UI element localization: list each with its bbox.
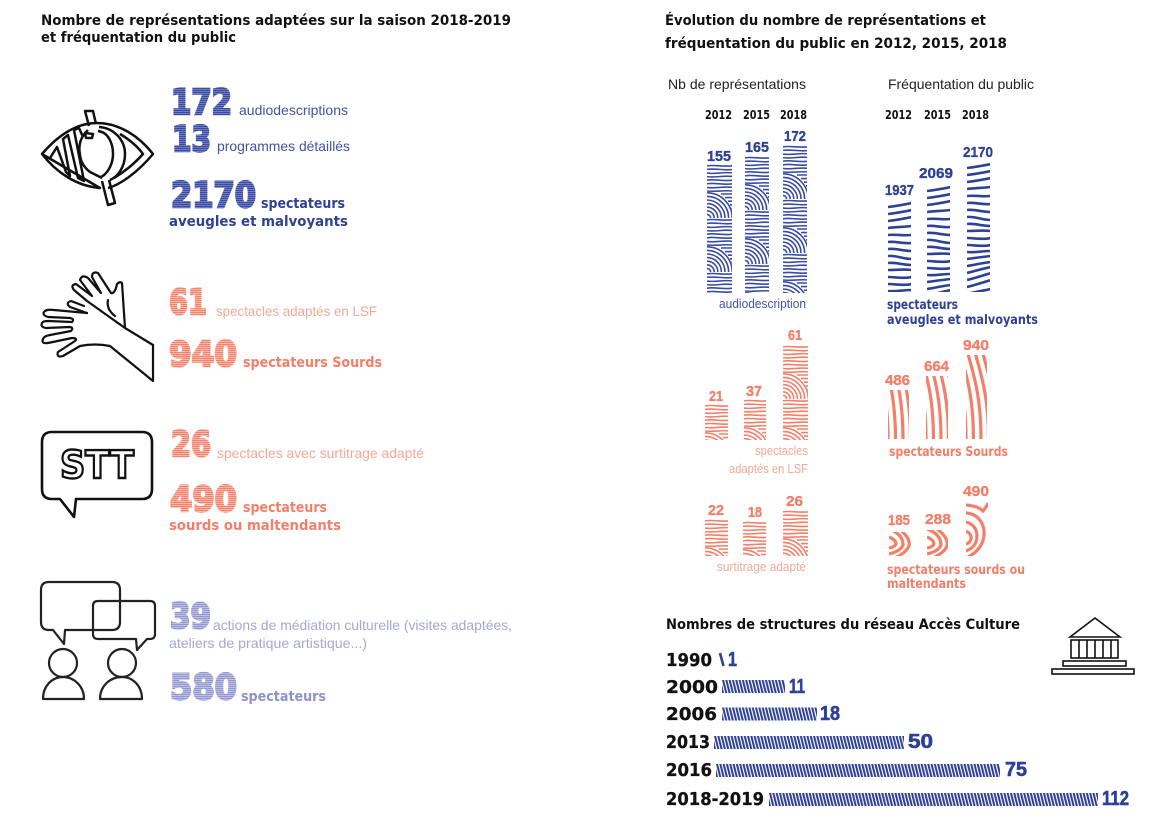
row: 2018-2019: 112 [1102, 788, 1129, 810]
stat: 940 spectateurs Sourds: 940 [169, 335, 237, 375]
chart: audiodescription representations: 165 [745, 139, 769, 156]
stat: 2170 spectateurs: aveugles et malvoyants [169, 214, 348, 230]
chart: blind attendance: 2069 [919, 165, 953, 182]
row: 2016: 75 [1005, 759, 1027, 781]
row: 2000: 11 [789, 676, 805, 698]
stat: 580 spectateurs [170, 668, 326, 708]
chart: audiodescription representations: 172 [784, 128, 806, 145]
row: 2006: 18 [820, 703, 840, 725]
icon: STT speech bubble [42, 432, 152, 517]
row: 1990 [666, 649, 737, 671]
heading: left title: Nombre de représentations adaptées sur la saison 2018-2019 [41, 13, 511, 29]
year labels: attendance: 2018 [962, 108, 989, 122]
stat: 39 actions de médiation: actions de médiation culturelle (visites adaptées, [213, 617, 512, 633]
stat: 61 spectacles LSF [169, 283, 377, 323]
stat: 580 spectateurs: 580 [170, 668, 237, 708]
chart: blind attendance: 1937 [885, 182, 914, 199]
year labels: representations: 2018 [780, 108, 807, 122]
heading: right title: Évolution du nombre de représentations et [665, 12, 986, 29]
stat: 26 spectacles surtitrage [171, 425, 424, 465]
row: 2016 [666, 759, 1027, 781]
stat: 172 audiodescriptions [171, 83, 348, 123]
stat: 490 spectateurs [169, 480, 341, 534]
chart: blind attendance [885, 144, 1038, 328]
heading: right title [665, 12, 1007, 52]
row: 2016: 2016 [666, 760, 712, 781]
panel: médiation culturelle [41, 582, 512, 708]
chart: Deaf attendance [885, 337, 1008, 460]
chart: audiodescription representations [707, 128, 807, 311]
stat: 172 audiodescriptions: 172 [171, 83, 232, 123]
chart: surtitrage representations [705, 493, 808, 574]
heading: left title: et fréquentation du public [41, 30, 236, 46]
bar: 185 [889, 532, 911, 556]
chart: LSF representations: 61 [788, 327, 802, 344]
column heading: representations: Nb de représentations [668, 76, 806, 92]
chart: LSF representations: adaptés en LSF [729, 461, 808, 476]
heading: right title: fréquentation du public en 2012, 2015, 2018 [665, 36, 1007, 52]
chart: audiodescription representations: audiodescription [719, 296, 806, 311]
stat: 13 programmes détaillés: programmes détaillés [217, 138, 350, 154]
chart: surtitrage representations: 26 [786, 493, 803, 510]
stat: 2170 spectateurs: 2170 [171, 176, 256, 216]
chart: LSF representations: 21 [709, 388, 723, 405]
stat: 39 actions de médiation [169, 597, 512, 651]
year labels: attendance: 2015 [924, 108, 951, 122]
row: 2000 [666, 676, 805, 698]
stat: 39 actions de médiation: ateliers de pratique artistique...) [169, 635, 367, 651]
row: 2018-2019: 2018-2019 [666, 789, 764, 810]
heading: left title [41, 13, 511, 46]
stat: 26 spectacles surtitrage: 26 [171, 425, 211, 465]
chart: Deaf attendance: 486 [885, 372, 910, 389]
chart: blind attendance: spectateurs [887, 298, 958, 313]
panel: LSF [42, 272, 382, 381]
chart: hard-of-hearing attendance: maltendants [887, 577, 966, 592]
chart: LSF representations: spectacles [755, 443, 808, 458]
year labels: representations: 2012 [705, 108, 732, 122]
chart: hard-of-hearing attendance: spectateurs sourds ou [887, 563, 1025, 578]
icon: STT speech bubble: STT [60, 443, 134, 487]
row: 2006 [666, 703, 840, 725]
year labels: attendance [885, 108, 989, 122]
stat: 940 spectateurs Sourds [169, 335, 382, 375]
stat: 13 programmes détaillés: 13 [172, 120, 211, 160]
stat: 61 spectacles LSF: spectacles adaptés en LSF [216, 303, 377, 319]
row: 2000: 2000 [666, 677, 718, 698]
stat: 490 spectateurs: 490 [170, 480, 237, 520]
chart: blind attendance: 2170 [963, 144, 993, 161]
stat: 2170 spectateurs [169, 176, 348, 230]
chart: Deaf attendance: spectateurs Sourds [889, 445, 1008, 460]
row: 2018-2019 [666, 788, 1129, 810]
year labels: representations: 2015 [743, 108, 770, 122]
row: 1990: 1 [728, 649, 737, 671]
stat: 13 programmes détaillés [172, 120, 350, 160]
chart: audiodescription representations: 155 [707, 148, 731, 165]
heading: network structures: Nombres de structures du réseau Accès Culture [666, 617, 1020, 633]
panel: surtitrage [42, 425, 424, 534]
stat: 26 spectacles surtitrage: spectacles avec surtitrage adapté [217, 445, 424, 461]
bar: 288 [927, 530, 948, 556]
year labels: attendance: 2012 [885, 108, 912, 122]
stat: 39 actions de médiation: 39 [170, 597, 211, 637]
bar: 490 [966, 502, 988, 556]
stat: 940 spectateurs Sourds: spectateurs Sourds [243, 355, 382, 371]
chart: LSF representations [705, 327, 808, 476]
stat: 2170 spectateurs: spectateurs [261, 196, 345, 212]
stat: 490 spectateurs: spectateurs [243, 500, 327, 516]
icon: signing hands [42, 272, 153, 381]
stat: 490 spectateurs: sourds ou maltendants [169, 518, 341, 534]
icon: two people talking [41, 582, 155, 699]
chart: hard-of-hearing attendance [887, 483, 1025, 592]
chart: hard-of-hearing attendance: 185 [888, 512, 910, 529]
chart: LSF representations: 37 [746, 383, 762, 400]
column heading: attendance: Fréquentation du public [888, 76, 1034, 92]
icon: crossed eye [42, 111, 153, 205]
panel: audiodescription [42, 83, 350, 230]
chart: hard-of-hearing attendance: 288 [925, 511, 951, 528]
row: 2006: 2006 [666, 704, 717, 725]
chart: surtitrage representations: 18 [748, 504, 762, 521]
chart: blind attendance: aveugles et malvoyants [887, 313, 1038, 328]
row: 2013 [666, 731, 933, 753]
bar chart: network growth [666, 649, 1129, 810]
row: 2013: 2013 [666, 732, 710, 753]
stat: 61 spectacles LSF: 61 [169, 283, 207, 323]
year labels: representations [705, 108, 807, 122]
icon: temple [1052, 618, 1134, 674]
chart: surtitrage representations: surtitrage adapté [717, 559, 806, 574]
row: 2013: 50 [908, 731, 933, 753]
chart: hard-of-hearing attendance: 490 [963, 483, 989, 500]
chart: surtitrage representations: 22 [708, 502, 724, 519]
chart: Deaf attendance: 664 [924, 358, 950, 375]
row: 1990: 1990 [666, 650, 712, 671]
stat: 580 spectateurs: spectateurs [241, 689, 326, 705]
stat: 172 audiodescriptions: audiodescriptions [239, 102, 348, 118]
chart: Deaf attendance: 940 [963, 337, 989, 354]
